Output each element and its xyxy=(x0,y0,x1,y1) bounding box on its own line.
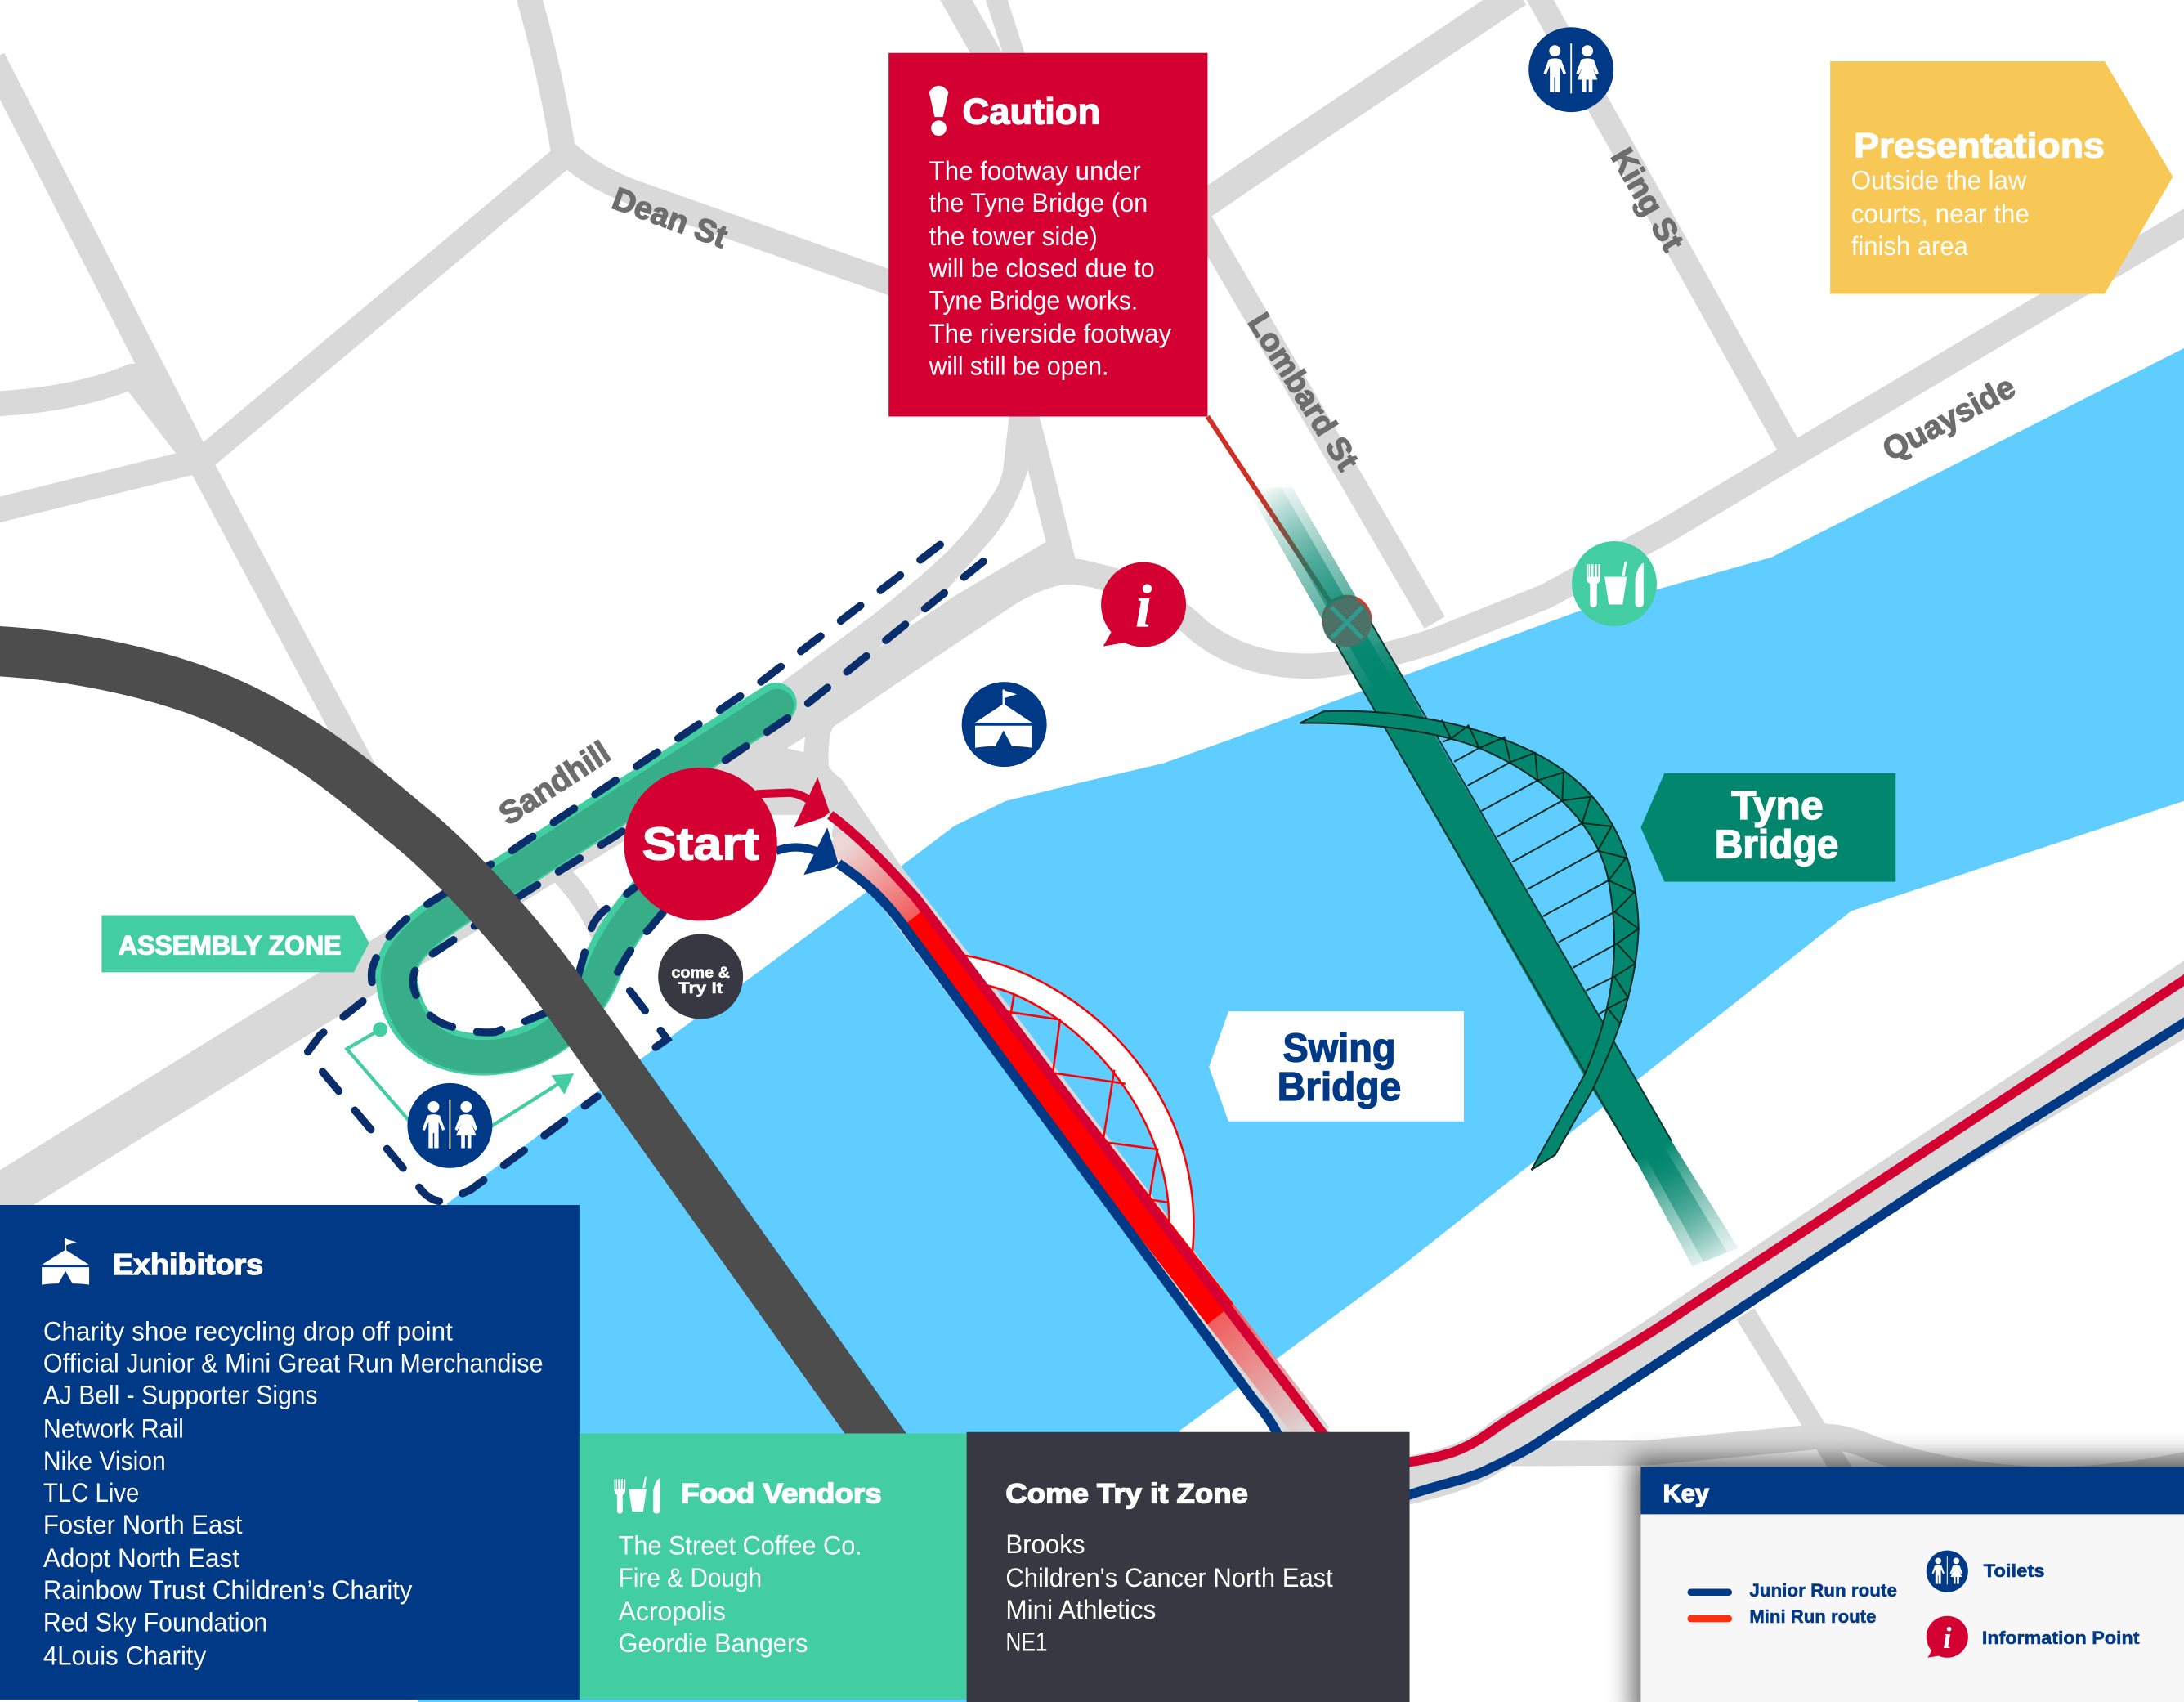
dark elevated road xyxy=(0,651,898,1466)
come try it list xyxy=(1005,1530,1333,1656)
junior and mini run route xyxy=(756,777,2184,1499)
label: tyne bridge: Bridge xyxy=(1715,822,1838,867)
icon: cutlery xyxy=(615,1477,660,1514)
assembly zone corridor xyxy=(396,704,777,1057)
caution body text: the Tyne Bridge (on xyxy=(929,188,1148,217)
assembly zone dashed boundary xyxy=(308,544,983,1202)
icon: exhibitors tent xyxy=(962,682,1047,767)
street name: Lombard St: Lombard St xyxy=(1241,307,1365,477)
start marker: Start xyxy=(642,817,759,869)
icon: tent xyxy=(42,1238,89,1285)
caution body text: The riverside footway xyxy=(929,319,1172,348)
label: tyne bridge: Tyne xyxy=(1731,783,1824,828)
exhibitors list: AJ Bell - Supporter Signs xyxy=(43,1381,318,1410)
start marker xyxy=(624,768,777,920)
key: toilets: Toilets xyxy=(1984,1561,2045,1581)
key: junior route: Junior Run route xyxy=(1749,1580,1897,1601)
label: tyne bridge xyxy=(1640,773,1895,882)
come try it heading: Come Try it Zone xyxy=(1005,1479,1248,1510)
food vendors heading: Food Vendors xyxy=(681,1479,882,1510)
come try it list: Children's Cancer North East xyxy=(1005,1563,1333,1592)
come and try it marker: come & xyxy=(671,964,730,982)
label: assembly zone: ASSEMBLY ZONE xyxy=(119,930,342,960)
come try it list: Mini Athletics xyxy=(1005,1595,1156,1624)
panel: presentations: courts, near the xyxy=(1851,199,2030,229)
key: information point xyxy=(1927,1616,2140,1658)
come try it list: NE1 xyxy=(1005,1627,1047,1656)
panel: exhibitors xyxy=(0,1205,580,1700)
caution body text: Tyne Bridge works. xyxy=(929,285,1138,315)
caution pointer line xyxy=(1207,417,1335,609)
exhibitors list xyxy=(43,1316,544,1670)
exhibitors list: Adopt North East xyxy=(43,1543,239,1573)
icon: exclamation mark xyxy=(929,86,948,136)
key: toilets xyxy=(1927,1551,2045,1592)
panel: presentations: Presentations xyxy=(1854,127,2105,166)
caution body text: the tower side) xyxy=(929,222,1098,251)
icon: toilets by King St xyxy=(1528,27,1613,112)
icon: toilets by assembly zone xyxy=(407,1083,492,1168)
label: assembly zone xyxy=(101,916,369,972)
label: swing bridge: Bridge xyxy=(1278,1064,1401,1109)
panel: key: Key xyxy=(1663,1480,1709,1507)
food vendors list xyxy=(619,1531,862,1658)
toilet direction arrows xyxy=(347,1023,571,1127)
exhibitors list: TLC Live xyxy=(43,1478,139,1507)
exhibitors heading: Exhibitors xyxy=(113,1248,263,1281)
tyne bridge deck xyxy=(1246,487,1739,1266)
caution body text: will be closed due to xyxy=(929,253,1155,283)
street name: Dean St: Dean St xyxy=(607,181,732,255)
exhibitors list: Official Junior & Mini Great Run Merchandise xyxy=(43,1348,544,1377)
exhibitors list: Foster North East xyxy=(43,1510,243,1539)
food vendors list: Geordie Bangers xyxy=(619,1628,808,1658)
swing bridge arch xyxy=(957,954,1193,1265)
panel: key xyxy=(1632,1458,2184,1702)
panel: presentations xyxy=(1830,61,2173,294)
come and try it marker xyxy=(658,934,743,1019)
exhibitors list: Charity shoe recycling drop off point xyxy=(43,1316,453,1346)
caution body text xyxy=(929,156,1172,380)
panel: presentations: Outside the law xyxy=(1851,166,2027,195)
key: mini route: Mini Run route xyxy=(1749,1606,1876,1627)
key: information point: i xyxy=(1943,1622,1952,1655)
exhibitors list: 4Louis Charity xyxy=(43,1641,207,1670)
tyne bridge arch xyxy=(1300,711,1639,1170)
caution body text: The footway under xyxy=(929,156,1141,186)
food vendors list: The Street Coffee Co. xyxy=(619,1531,862,1561)
food vendors list: Acropolis xyxy=(619,1597,726,1626)
caution heading: Caution xyxy=(963,92,1100,132)
come try it list: Brooks xyxy=(1005,1530,1085,1559)
panel: caution xyxy=(888,53,1207,417)
exhibitors list: Network Rail xyxy=(43,1414,184,1444)
come and try it marker: Try It xyxy=(678,979,723,997)
panel: come try it zone xyxy=(967,1432,1410,1702)
icon: information point: i xyxy=(1135,573,1152,641)
street name: Quayside: Quayside xyxy=(1877,370,2021,468)
key: information point: Information Point xyxy=(1982,1628,2140,1648)
caution body text: will still be open. xyxy=(929,351,1108,380)
exhibitors list: Nike Vision xyxy=(43,1446,166,1476)
label: swing bridge: Swing xyxy=(1282,1025,1395,1070)
icon: information point xyxy=(1101,562,1186,647)
street name: Sandhill: Sandhill xyxy=(493,735,616,832)
street name: King St: King St xyxy=(1604,142,1690,257)
exhibitors list: Red Sky Foundation xyxy=(43,1607,267,1637)
food vendors list: Fire & Dough xyxy=(619,1563,762,1592)
river xyxy=(418,348,2184,1702)
icon: food xyxy=(1572,541,1657,626)
panel: food vendors xyxy=(580,1433,967,1700)
panel: presentations: finish area xyxy=(1851,231,1968,261)
label: swing bridge xyxy=(1209,1011,1464,1122)
exhibitors list: Rainbow Trust Children’s Charity xyxy=(43,1575,413,1605)
